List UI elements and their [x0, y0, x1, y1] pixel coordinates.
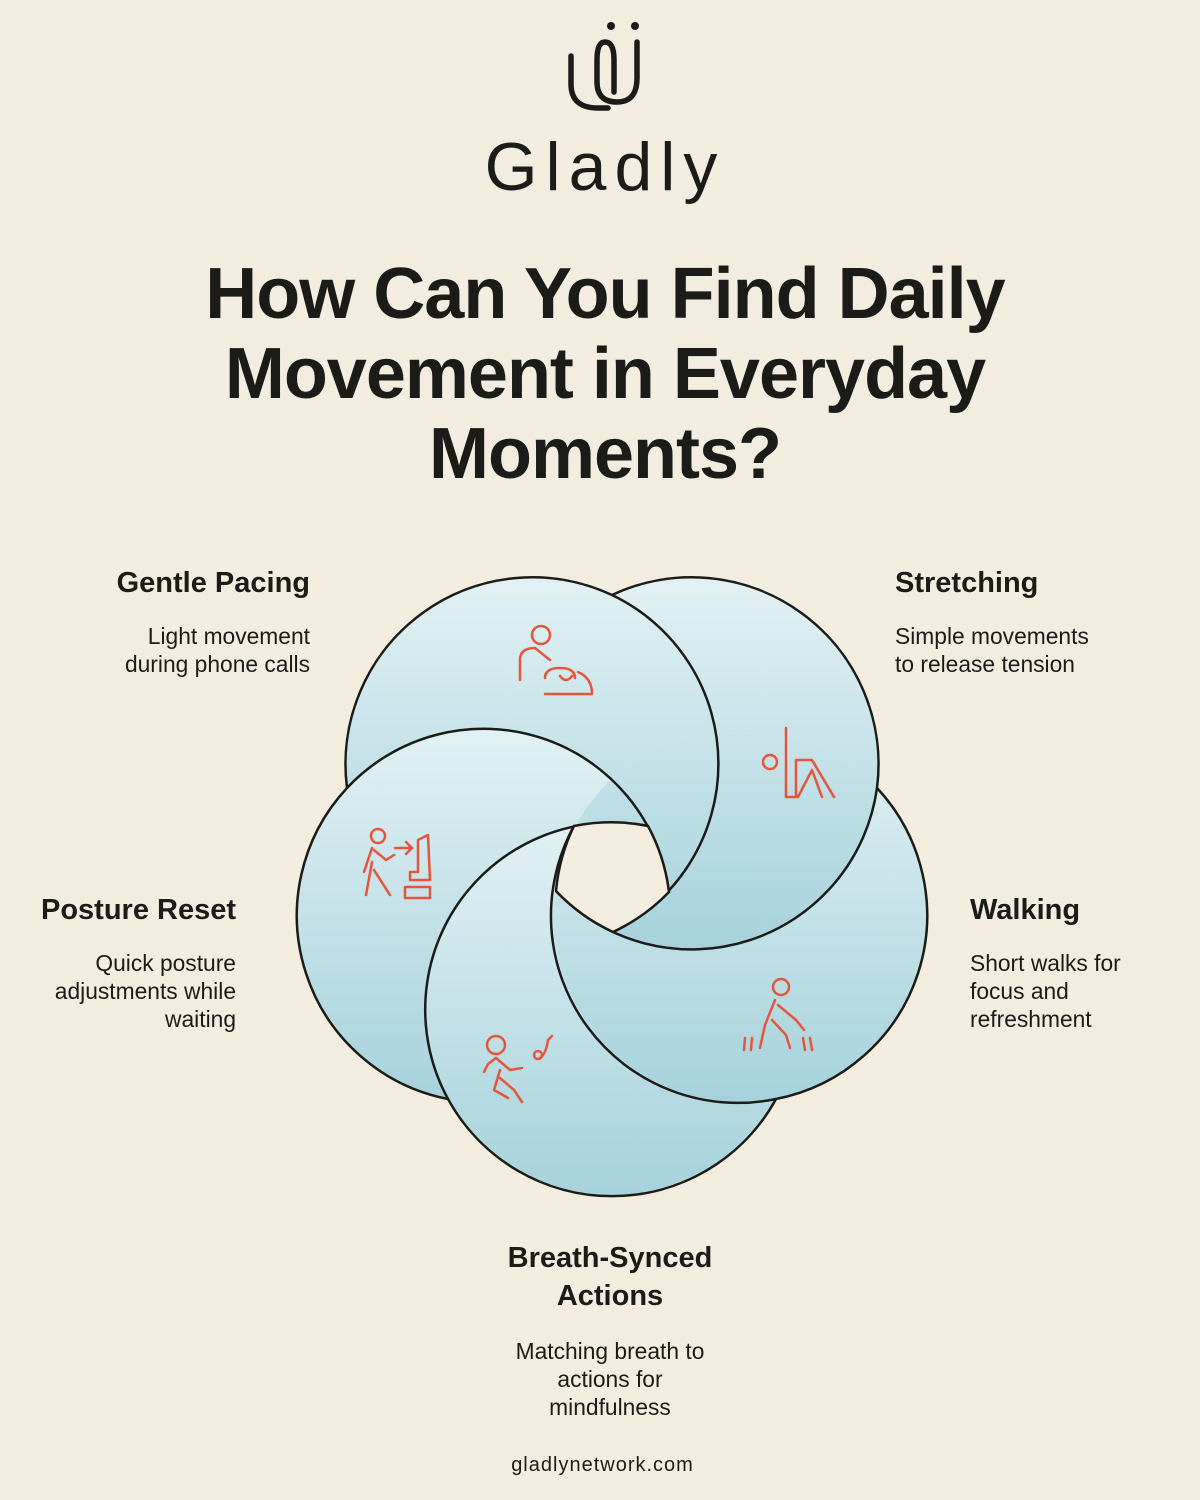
- icon: posture reset: [364, 829, 430, 898]
- icon: stretching: [763, 728, 834, 797]
- ring diagram: [295, 576, 929, 1198]
- center hole: [556, 822, 669, 932]
- label: posture reset: adjustments while: [55, 978, 236, 1004]
- label: walking: refreshment: [970, 1006, 1092, 1032]
- label: posture reset: Quick posture: [95, 950, 236, 976]
- label: stretching: Simple movements: [895, 623, 1089, 649]
- brand name: Gladly: [485, 129, 725, 205]
- icon: breath-synced: [484, 1036, 552, 1102]
- label: stretching: to release tension: [895, 651, 1075, 677]
- label: breath-synced actions: Matching breath to: [516, 1338, 704, 1364]
- label: walking: Short walks for: [970, 950, 1121, 976]
- label: posture reset: Posture Reset: [41, 894, 236, 926]
- label: gentle pacing: Light movement: [148, 623, 310, 649]
- label: gentle pacing: during phone calls: [125, 651, 310, 677]
- label: gentle pacing: Gentle Pacing: [117, 567, 310, 599]
- label: breath-synced actions: actions for: [557, 1366, 663, 1392]
- label: breath-synced actions: Breath-Synced: [508, 1242, 712, 1274]
- label: stretching: [895, 567, 1089, 677]
- label: walking: focus and: [970, 978, 1069, 1004]
- label: walking: [970, 894, 1121, 1032]
- label: walking: Walking: [970, 894, 1080, 926]
- label: breath-synced actions: Actions: [557, 1280, 663, 1312]
- logo icon: [568, 22, 640, 111]
- icon: gentle pacing: [520, 626, 592, 694]
- label: breath-synced actions: mindfulness: [549, 1394, 671, 1420]
- label: gentle pacing: [117, 567, 310, 677]
- label: breath-synced actions: [508, 1242, 712, 1420]
- title: How Can You Find Daily Movement in Everyday Moments?: [205, 254, 1005, 494]
- label: posture reset: [41, 894, 236, 1032]
- footer url: gladlynetwork.com: [511, 1454, 694, 1476]
- label: stretching: Stretching: [895, 567, 1038, 599]
- icon: walking: [744, 979, 812, 1050]
- label: posture reset: waiting: [165, 1006, 236, 1032]
